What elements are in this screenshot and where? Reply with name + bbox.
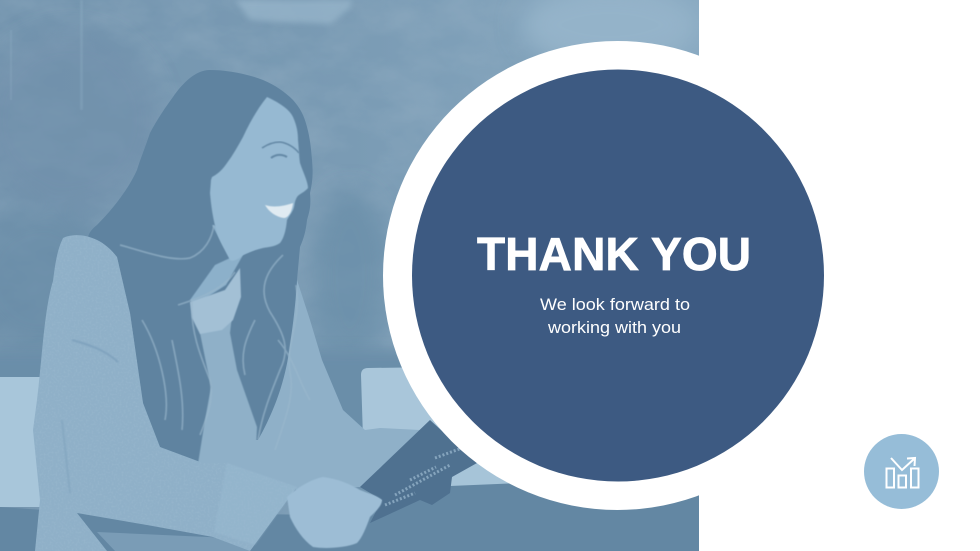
title: THANK YOU — [477, 228, 751, 280]
hand holding book — [287, 477, 382, 548]
sweater: left torso and sleeve — [33, 235, 297, 551]
neck — [190, 225, 254, 302]
eye and brow — [262, 142, 299, 158]
icon: chart badge — [864, 434, 939, 509]
white circle ring — [383, 41, 852, 510]
wall background — [0, 0, 700, 551]
right chair — [361, 368, 442, 470]
icon: trend arrow — [891, 458, 915, 470]
sweater folds and cuff — [62, 340, 297, 545]
sweater: chest — [198, 321, 258, 463]
subtitle: working with you — [547, 318, 681, 337]
subtitle: We look forward to — [540, 295, 690, 314]
face — [210, 97, 308, 261]
table — [0, 483, 699, 551]
lower wall shade — [0, 348, 402, 490]
table highlight — [97, 532, 250, 551]
panel: blue circle — [412, 70, 824, 482]
hair — [88, 70, 313, 462]
smile — [265, 203, 293, 218]
hair highlights — [120, 224, 297, 440]
icon: bars — [886, 468, 918, 488]
left chair — [0, 377, 40, 507]
back light strip behind table — [450, 463, 509, 486]
photo: smiling woman at table, blue duotone — [0, 0, 700, 551]
subtitle — [540, 295, 690, 337]
sweater texture — [0, 220, 440, 551]
sweater: right side — [247, 280, 420, 490]
book — [360, 420, 477, 523]
collar — [190, 268, 241, 334]
